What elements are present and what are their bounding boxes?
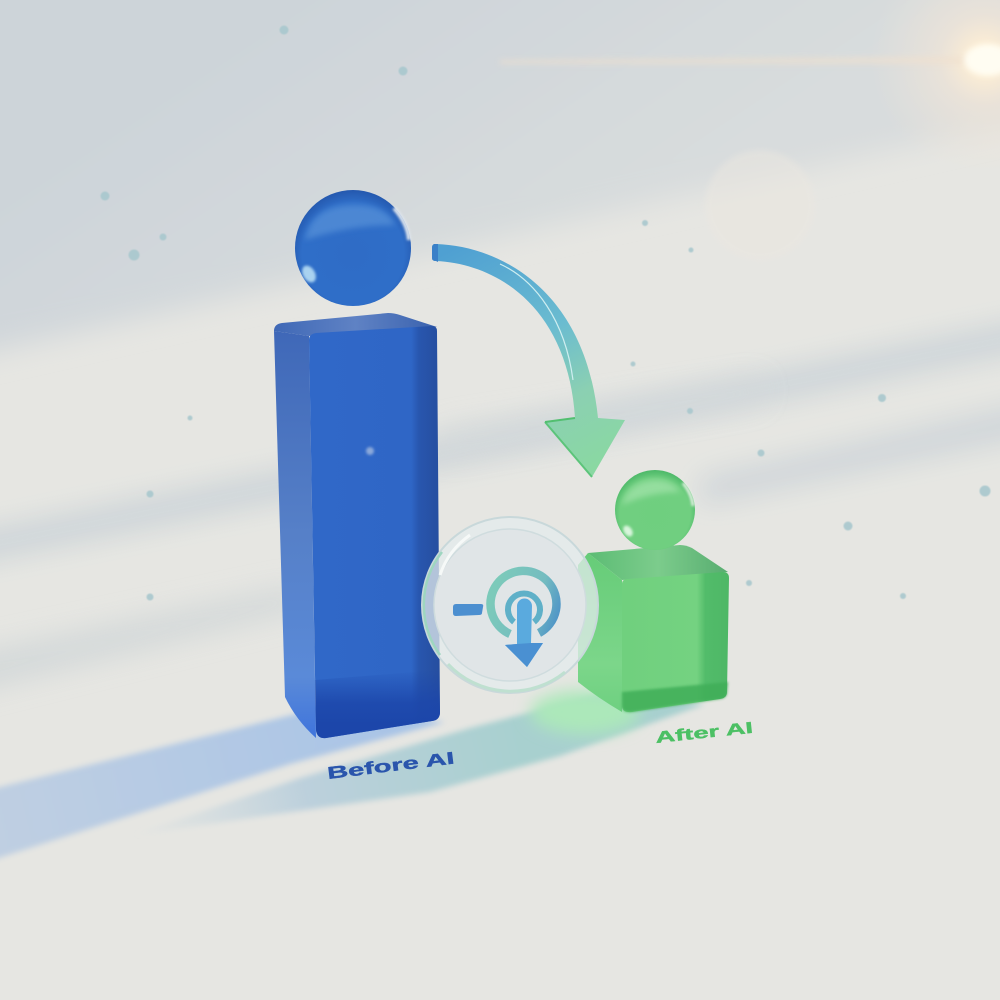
- label: Before AI: Before AI: [326, 749, 456, 783]
- ground shadows: [0, 690, 705, 864]
- bar top: [274, 313, 437, 336]
- water droplets: [100, 26, 990, 600]
- glass ring icon: [422, 517, 598, 693]
- cube: After AI: [578, 545, 729, 712]
- cube top: [588, 545, 728, 580]
- bar base shade: [315, 670, 440, 738]
- bar front: [309, 326, 440, 738]
- cube left side: [578, 553, 622, 712]
- signal arcs: [490, 571, 556, 634]
- glass disc: [434, 529, 586, 681]
- label: After AI: After AI: [655, 720, 754, 747]
- down arrow: [505, 598, 543, 667]
- cube front: [622, 572, 729, 712]
- bar: Before AI: [274, 313, 440, 738]
- sphere: Before AI: [295, 190, 411, 306]
- minus sign: [453, 604, 483, 616]
- sphere: After AI: [615, 470, 695, 550]
- light and shadow bands: [0, 0, 1000, 735]
- lens flare: [500, 0, 1000, 260]
- bar left side: [274, 331, 316, 738]
- cube base shade: [622, 682, 728, 712]
- curved arrow: [432, 244, 625, 477]
